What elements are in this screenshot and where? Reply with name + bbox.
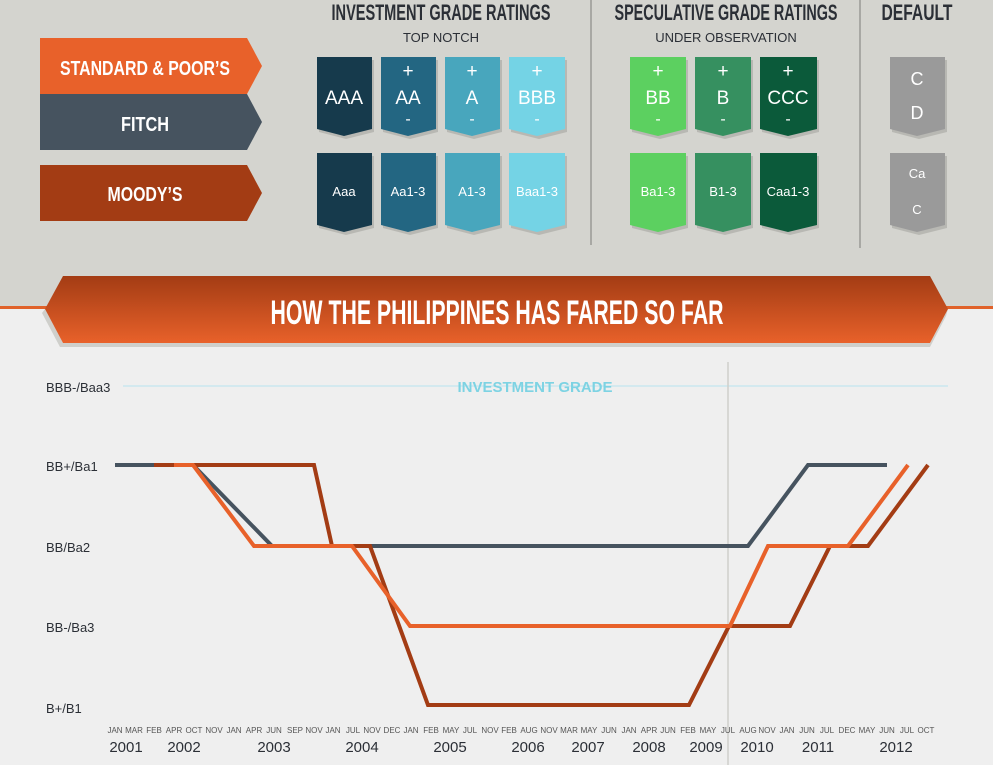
x axis labels: MAR (125, 726, 143, 735)
x axis labels: FEB (680, 726, 696, 735)
x axis labels: MAY (443, 726, 460, 735)
badges row 1 (S&P / Fitch): + (782, 61, 794, 82)
heading: default: DEFAULT (882, 0, 953, 25)
chart: rating history: INVESTMENT GRADE (457, 379, 613, 396)
badges row 1 (S&P / Fitch): + (402, 61, 414, 82)
badges row 1 (S&P / Fitch): - (534, 111, 540, 128)
badges row 1 (S&P / Fitch): + (717, 61, 729, 82)
line: fitch (115, 465, 887, 546)
badges row 1 (S&P / Fitch): - (405, 111, 411, 128)
heading: speculative grade ratings: SPECULATIVE GRADE RATINGS (614, 0, 838, 25)
x axis labels: NOV (205, 726, 223, 735)
x axis labels: 2003 (257, 739, 291, 756)
x axis labels: JAN (779, 726, 795, 735)
chart: rating history: BB+/Ba1 (46, 459, 98, 474)
badges row 1 (S&P / Fitch): B (717, 88, 729, 109)
tab: standard & poor's: STANDARD & POOR’S (60, 58, 230, 80)
badges row 2 (Moody's): C (912, 202, 922, 217)
x axis labels: NOV (758, 726, 776, 735)
x axis labels: 2005 (433, 739, 467, 756)
x axis labels: JUL (346, 726, 361, 735)
x axis labels: 2011 (802, 739, 834, 756)
x axis labels: APR (246, 726, 262, 735)
badges row 1 (S&P / Fitch): - (469, 111, 475, 128)
x axis labels: APR (166, 726, 182, 735)
x axis labels: JAN (403, 726, 419, 735)
badges row 1 (S&P / Fitch): - (655, 111, 661, 128)
badges row 2 (Moody's): Aaa (332, 184, 356, 199)
x axis labels: JUL (900, 726, 915, 735)
x axis labels: FEB (501, 726, 517, 735)
badges row 2 (Moody's): Baa1-3 (516, 184, 558, 199)
badges row 1 (S&P / Fitch): BBB (518, 88, 556, 109)
badges row 1 (S&P / Fitch) (317, 57, 947, 139)
tab: fitch (40, 94, 262, 150)
x axis labels: OCT (186, 726, 203, 735)
chart: rating history: B+/B1 (46, 701, 82, 716)
tab: standard & poor's (40, 38, 262, 94)
badges row 1 (S&P / Fitch): CCC (767, 88, 809, 109)
chart: rating history: BBB-/Baa3 (46, 380, 110, 395)
x axis labels: JUN (799, 726, 815, 735)
x axis labels: DEC (384, 726, 401, 735)
x axis labels: AUG (520, 726, 538, 735)
x axis labels: JUL (820, 726, 835, 735)
x axis labels: 2008 (632, 739, 666, 756)
x axis labels: 2004 (345, 739, 379, 756)
x axis labels: NOV (363, 726, 381, 735)
x axis labels: SEP (287, 726, 303, 735)
x axis labels: MAY (859, 726, 876, 735)
badges row 1 (S&P / Fitch): BB (645, 88, 671, 109)
badges row 1 (S&P / Fitch): + (531, 61, 543, 82)
line: moody's (154, 465, 928, 705)
x axis labels: FEB (423, 726, 439, 735)
x axis labels: 2006 (511, 739, 545, 756)
x axis labels: 2002 (167, 739, 201, 756)
chart: rating history: BB/Ba2 (46, 540, 90, 555)
x axis labels: JUN (266, 726, 282, 735)
badges row 1 (S&P / Fitch): - (720, 111, 726, 128)
x axis labels: AUG (739, 726, 757, 735)
x axis labels: JUL (721, 726, 736, 735)
chart: rating history: BB-/Ba3 (46, 620, 94, 635)
x axis labels: JUN (601, 726, 617, 735)
x axis labels: JAN (325, 726, 341, 735)
badges row 1 (S&P / Fitch): - (785, 111, 791, 128)
x axis labels: NOV (305, 726, 323, 735)
badges row 2 (Moody's) (317, 153, 947, 235)
heading: speculative grade ratings: UNDER OBSERVATION (655, 30, 797, 45)
x axis labels: DEC (839, 726, 856, 735)
x axis labels: JAN (621, 726, 637, 735)
x axis labels: MAY (700, 726, 717, 735)
chart: rating history (46, 362, 948, 765)
badges row 2 (Moody's): Ba1-3 (641, 184, 675, 199)
tab: moody's (40, 165, 262, 221)
badges row 2 (Moody's): A1-3 (458, 184, 486, 199)
x axis labels: JUL (463, 726, 478, 735)
line: standard & poor's (174, 465, 908, 626)
x axis labels (107, 726, 935, 756)
x axis labels: JUN (660, 726, 676, 735)
badges row 1 (S&P / Fitch): A (466, 88, 479, 109)
x axis labels: NOV (481, 726, 499, 735)
x axis labels: 2010 (740, 739, 774, 756)
x axis labels: JUN (879, 726, 895, 735)
x axis labels: APR (641, 726, 657, 735)
badges row 1 (S&P / Fitch): AAA (325, 88, 363, 109)
badges row 1 (S&P / Fitch): + (466, 61, 478, 82)
heading: investment grade ratings: TOP NOTCH (403, 30, 479, 45)
x axis labels: 2001 (109, 739, 143, 756)
banner: how the philippines has fared so far: HOW THE PHILIPPINES HAS FARED SO FAR (270, 294, 724, 332)
heading: investment grade ratings: INVESTMENT GRADE RATINGS (332, 0, 550, 25)
heading: speculative grade ratings (614, 0, 838, 45)
x axis labels: JAN (226, 726, 242, 735)
badges row 2 (Moody's): B1-3 (709, 184, 737, 199)
x axis labels: 2012 (879, 739, 913, 756)
x axis labels: FEB (146, 726, 162, 735)
badges row 1 (S&P / Fitch): D (910, 103, 924, 123)
badges row 2 (Moody's): Aa1-3 (391, 184, 425, 199)
badges row 1 (S&P / Fitch): AA (395, 88, 421, 109)
x axis labels: NOV (540, 726, 558, 735)
badges row 1 (S&P / Fitch): C (910, 69, 924, 89)
tab: moody's: MOODY’S (108, 184, 182, 206)
heading: investment grade ratings (332, 0, 550, 45)
banner: how the philippines has fared so far (42, 276, 948, 347)
x axis labels: MAY (581, 726, 598, 735)
badges row 2 (Moody's): Ca (909, 166, 926, 181)
x axis labels: OCT (918, 726, 935, 735)
tab: fitch: FITCH (121, 114, 169, 136)
x axis labels: JAN (107, 726, 123, 735)
x axis labels: 2009 (689, 739, 723, 756)
x axis labels: 2007 (571, 739, 605, 756)
badges row 1 (S&P / Fitch): + (652, 61, 664, 82)
badges row 2 (Moody's): Caa1-3 (767, 184, 809, 199)
x axis labels: MAR (560, 726, 578, 735)
